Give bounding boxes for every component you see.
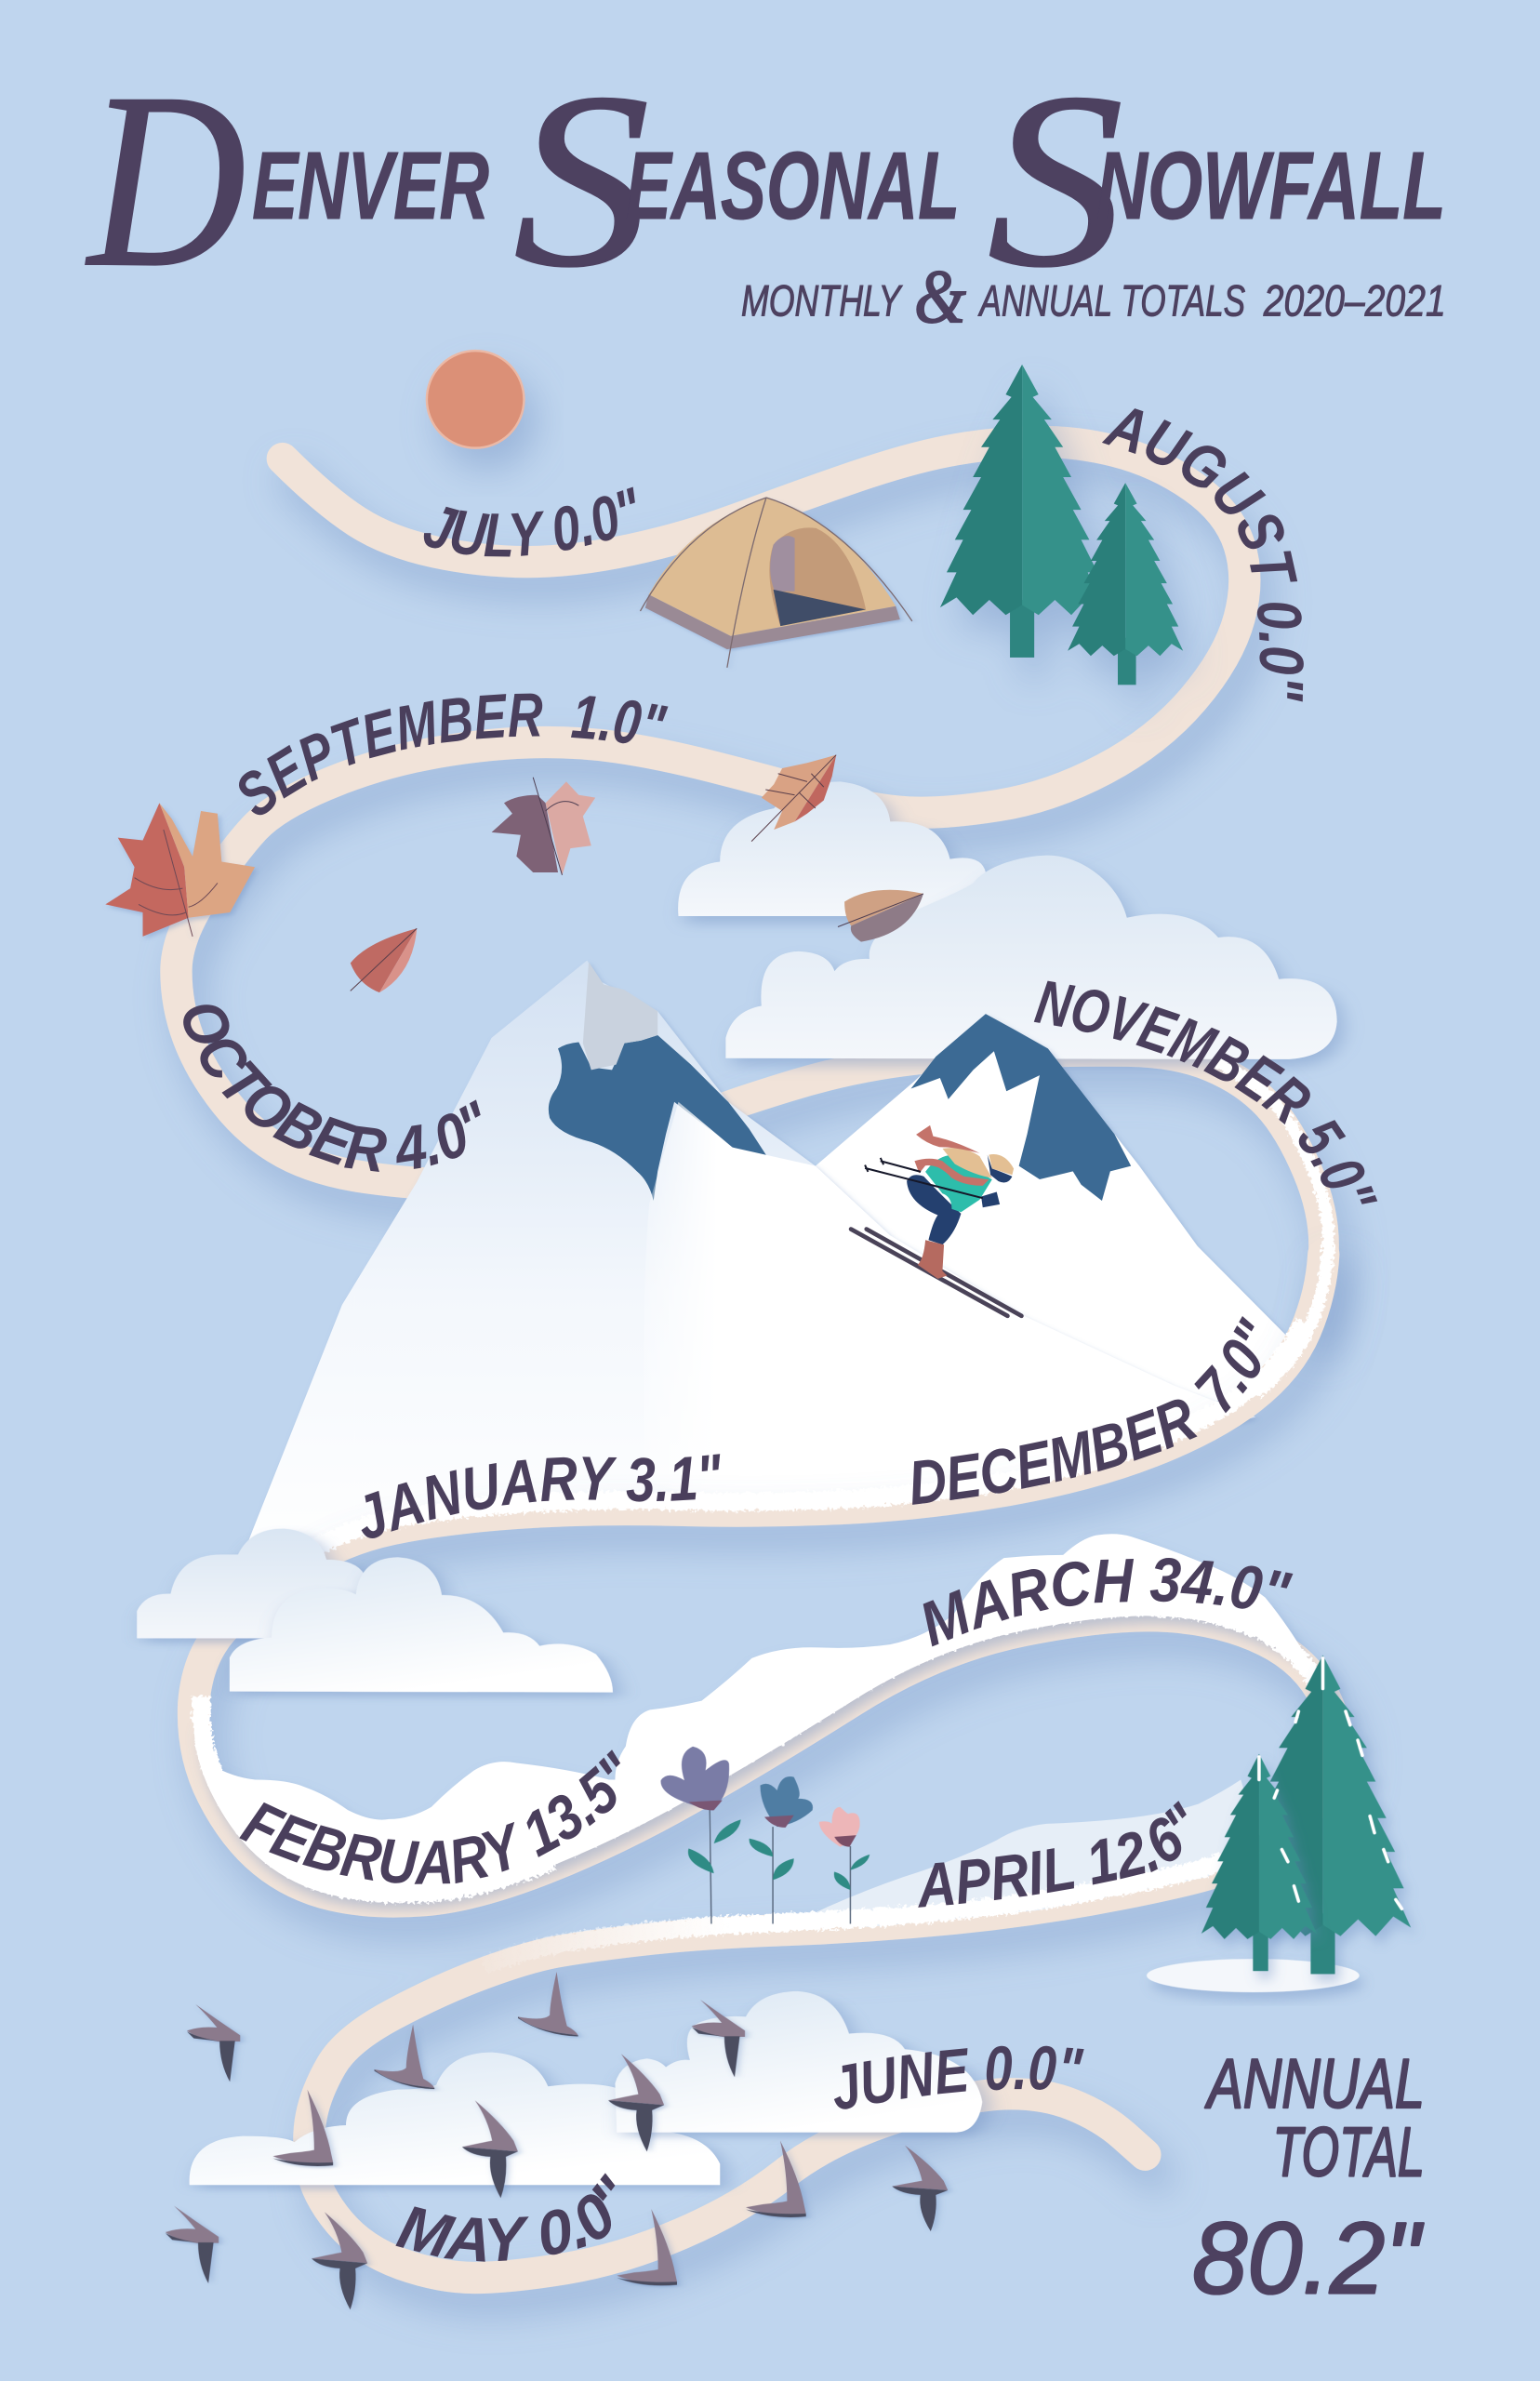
month label: November: NOVEMBER 5.0" (1034, 980, 1378, 1204)
mountain: right (816, 1014, 1293, 1401)
leaf: big maple (105, 803, 255, 937)
subtitle (741, 254, 1446, 339)
mountain ice cap (583, 962, 657, 1070)
snow on ribbon: speckled edges (201, 1062, 1328, 1965)
cloud: winter front (230, 1557, 613, 1693)
birds (166, 1972, 948, 2309)
subtitle: MONTHLY (741, 277, 903, 326)
snow flecks on trees (1259, 1658, 1401, 1909)
tree: large snowy (1235, 1656, 1411, 1974)
annual total (1192, 2044, 1425, 2315)
tent (640, 498, 912, 668)
title: S (988, 42, 1124, 319)
leaf: small red (351, 928, 417, 992)
annual total: 80.2" (1192, 2201, 1424, 2315)
sun (427, 351, 524, 448)
trees: snowy pair (1147, 1656, 1411, 1992)
month label: February: FEBRUARY 13.5" (239, 1749, 620, 1884)
month label: May: MAY 0.0" (396, 2173, 616, 2262)
ribbon: July to October (176, 442, 1244, 1184)
tree: small snowy (1201, 1754, 1317, 1971)
subtitle: ANNUAL TOTALS (977, 277, 1245, 326)
month label: January: JANUARY 3.1" (361, 1454, 720, 1538)
flowers (661, 1747, 870, 1923)
snow on ribbon: February and March mass (194, 1534, 1319, 1901)
month label: April: APRIL 12.6" (918, 1801, 1187, 1908)
snow on ribbon: April hill (794, 1779, 1261, 1927)
cloud: winter back (137, 1529, 365, 1638)
leaf: mauve maple (492, 778, 595, 875)
title: ENVER (252, 132, 489, 239)
ribbon: December to June (193, 1255, 1335, 2278)
mountain rock: right (911, 1014, 1131, 1201)
cloud: small upper (678, 781, 986, 916)
month label: July: JULY 0.0" (424, 487, 635, 556)
month label: September: SEPTEMBER 1.0" (239, 694, 668, 815)
annual total: TOTAL (1273, 2113, 1425, 2191)
title: S (513, 42, 650, 319)
subtitle: & (914, 254, 966, 339)
leaf: brown (838, 890, 923, 942)
title: D (85, 42, 246, 319)
subtitle: 2020–2021 (1263, 277, 1446, 326)
mountain: front hill (644, 1102, 1255, 1513)
mountains (238, 961, 1293, 1566)
trees: summer pair (940, 365, 1183, 685)
month label: December: DECEMBER 7.0" (912, 1316, 1261, 1505)
title: EASONAL (626, 132, 960, 239)
mountain rock: left (549, 1035, 770, 1201)
mountain: left (238, 961, 1255, 1566)
cloud: large upper (725, 856, 1337, 1059)
month label: June: JUNE 0.0" (833, 2046, 1084, 2109)
leaf: oak on ribbon (751, 755, 836, 842)
cloud: lower left (190, 2053, 720, 2185)
title (85, 42, 1446, 319)
snow mound (1147, 1959, 1360, 1992)
month label: March: MARCH 34.0" (923, 1558, 1293, 1646)
ribbon: November (714, 1051, 1324, 1331)
annual total: ANNUAL (1204, 2044, 1425, 2122)
skier (851, 1125, 1021, 1316)
month label: October: OCTOBER 4.0" (183, 1004, 481, 1172)
month label: August: AUGUST 0.0" (1102, 408, 1304, 701)
cloud: lower right (615, 1991, 982, 2133)
